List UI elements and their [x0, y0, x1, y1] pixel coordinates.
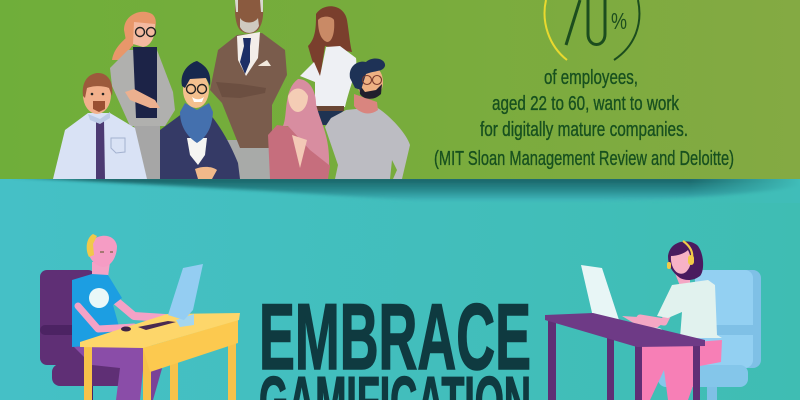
text block: statistic description	[434, 67, 734, 170]
person: woman in grey blazer	[110, 12, 175, 179]
keyboard and mouse	[121, 321, 176, 332]
chair: purple	[40, 270, 127, 400]
person: woman in pink hijab	[268, 79, 330, 179]
illustration: woman at purple desk	[545, 241, 761, 400]
monitor: white	[581, 265, 620, 328]
person: man with beard in grey sweater	[325, 59, 410, 179]
desk: purple	[545, 313, 705, 400]
person: man with blue scarf	[160, 61, 240, 179]
illustration: group of employees	[53, 0, 410, 179]
title: Embrace Gamification	[259, 284, 531, 400]
desk: yellow	[80, 313, 240, 400]
figure: man with headset	[72, 234, 165, 400]
person: woman in white shirt	[300, 6, 356, 125]
illustration: man at yellow desk	[40, 234, 240, 400]
person: man with tie and blue shirt	[53, 73, 147, 179]
text block: statistic description: aged 22 to 60, want to work	[492, 93, 680, 115]
figure: woman with headset	[622, 241, 722, 400]
person: older man in brown suit	[210, 0, 287, 179]
stat ring: 70 percent	[545, 0, 639, 60]
panel: green top section	[0, 0, 800, 179]
keyboard and mouse	[610, 321, 662, 332]
panel: teal bottom section	[0, 177, 800, 400]
chair: light blue	[658, 270, 761, 400]
text block: statistic description: for digitally mature companies.	[480, 119, 688, 141]
monitor: blue	[168, 264, 203, 327]
stat ring: 70 percent: %	[611, 8, 627, 34]
text block: statistic description: of employees,	[544, 67, 638, 89]
title: Embrace Gamification: EMBRACE	[259, 284, 531, 389]
